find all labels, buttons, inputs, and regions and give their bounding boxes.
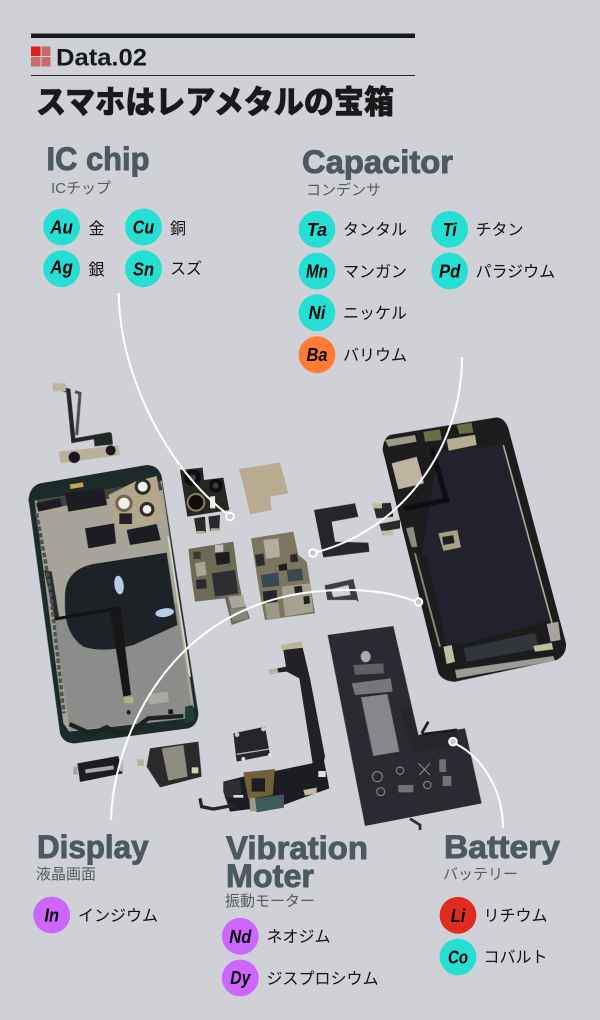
element: Mn <box>299 253 407 289</box>
subheading: バッテリー: バッテリー <box>443 866 518 883</box>
speaker <box>137 742 202 787</box>
panel: IC chip <box>43 141 202 287</box>
camera plate <box>108 476 164 531</box>
dock flex cable <box>268 641 325 763</box>
photo: exploded phone parts, left <box>29 383 202 787</box>
element: Ba <box>299 336 407 373</box>
element: Ag: 銀 <box>88 261 105 279</box>
icon: red squares <box>31 46 50 66</box>
metal shield plate <box>239 462 288 514</box>
element: Dy <box>222 960 379 996</box>
element: Cu: 銅 <box>170 220 186 238</box>
element: Dy: Dy <box>230 967 252 988</box>
element: Sn <box>125 250 202 287</box>
front camera flex <box>53 383 120 463</box>
element: Ni: ニッケル <box>343 304 407 322</box>
element: Ba: バリウム <box>343 346 407 364</box>
element: Au <box>43 209 105 245</box>
element: Nd: Nd <box>229 926 252 947</box>
panel: Vibration Moter <box>222 830 379 996</box>
subheading: 振動モーター: 振動モーター <box>225 893 315 910</box>
element: Pd <box>431 253 555 289</box>
header <box>31 34 415 120</box>
photo: dock flex and small shield <box>200 641 329 812</box>
heading: IC chip: IC chip <box>46 141 150 177</box>
element: Ti: Ti <box>443 219 457 240</box>
photo: camera, shield and logic boards <box>180 462 315 625</box>
panel: Capacitor <box>299 144 555 373</box>
element: Au: 金 <box>88 220 105 238</box>
element: Li <box>440 897 548 934</box>
element: In <box>33 897 158 933</box>
logic board A <box>188 542 250 625</box>
label: Data.02: Data.02 <box>56 44 147 72</box>
subheading: コンデンサ: コンデンサ <box>306 181 381 199</box>
element: Co: Co <box>448 946 468 968</box>
element: Ba: Ba <box>306 344 328 365</box>
element: Ta: タンタル <box>343 221 407 239</box>
element: Ti <box>431 211 524 248</box>
subheading: ICチップ: ICチップ <box>51 180 111 197</box>
SIM tray <box>325 579 359 602</box>
element: Ag: Ag <box>49 256 73 278</box>
logic board B <box>251 532 315 620</box>
element: Nd: ネオジム <box>266 928 331 946</box>
subheading: 液晶画面: 液晶画面 <box>36 866 96 883</box>
element: In: In <box>44 904 59 926</box>
heading: Display: Display <box>37 829 149 865</box>
element: Cu <box>125 209 186 245</box>
leader line: Battery <box>449 738 503 828</box>
heading: Vibration Moter: Moter <box>226 858 314 894</box>
element: Cu: Cu <box>133 216 155 238</box>
element: Pd: Pd <box>439 260 461 282</box>
element: In: インジウム <box>78 907 158 925</box>
heading: Vibration Moter <box>226 830 368 894</box>
small shield <box>233 727 272 762</box>
heading: Vibration Moter: Vibration <box>226 830 368 866</box>
element: Au: Au <box>49 216 73 238</box>
display panel <box>383 417 566 682</box>
leader line: IC chip <box>119 293 234 520</box>
panel: Display <box>33 829 158 933</box>
element: Dy: ジスプロシウム <box>266 970 379 988</box>
battery <box>328 626 482 830</box>
element: Mn: マンガン <box>343 263 407 281</box>
title: スマホはレアメタルの宝箱 <box>36 84 394 120</box>
heading: Capacitor: Capacitor <box>302 144 453 180</box>
element: Sn: スズ <box>170 260 202 278</box>
element: Li: Li <box>451 905 466 926</box>
rear camera module <box>180 468 229 534</box>
dock connector board <box>200 757 329 812</box>
L shield plate <box>314 503 369 557</box>
element: Co: コバルト <box>484 950 548 966</box>
wireless charging coil <box>65 553 177 650</box>
leader line: Capacitor <box>309 357 462 557</box>
panel: Battery <box>440 829 560 975</box>
element: Ta: Ta <box>307 219 327 240</box>
heading: Battery: Battery <box>444 829 560 865</box>
element: Co <box>440 939 548 975</box>
leader line: Display <box>111 590 422 820</box>
element: Mn: Mn <box>306 260 328 282</box>
chip <box>438 530 461 551</box>
element: Pd: パラジウム <box>476 263 555 281</box>
element: Ag <box>43 250 105 287</box>
element: Sn: Sn <box>133 258 154 280</box>
back phone body <box>29 465 198 743</box>
blue pads <box>113 575 125 595</box>
element: Ni: Ni <box>308 302 326 323</box>
taptic engine <box>73 756 123 782</box>
element: Li: リチウム <box>484 907 548 925</box>
photo: display, battery and parts, right <box>314 417 566 830</box>
element: Nd <box>222 918 331 955</box>
element: Ti: チタン <box>476 221 524 239</box>
element: Ni <box>299 294 407 331</box>
display flex tab <box>373 503 400 535</box>
element: Ta <box>299 211 407 248</box>
